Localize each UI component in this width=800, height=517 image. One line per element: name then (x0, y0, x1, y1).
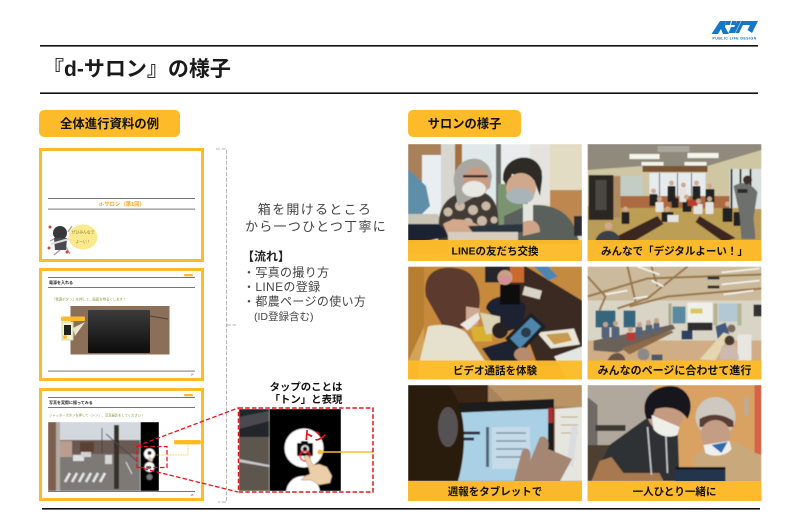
slide 3: taking a photo: 15 (191, 493, 194, 497)
slide 2: turning on the power: 14 (191, 372, 194, 376)
caption: ビデオ通話を体験 (453, 364, 537, 377)
heading pill: 全体進行資料の例 (39, 110, 180, 137)
heading pill: 全体進行資料の例: 全体進行資料の例 (60, 116, 159, 131)
slide 1: title slide: d-サロン（第1回） (99, 200, 145, 208)
red tap text トン: トン (301, 428, 327, 444)
caption (408, 481, 582, 501)
flow list: ・LINEの登録 (243, 279, 320, 294)
mascot with speech bubble (48, 224, 98, 255)
power button callout (61, 316, 85, 340)
photo: ビデオ通話を体験 (408, 266, 582, 380)
caption (588, 240, 762, 261)
note: タップのことは「トン」と表現: タップのことは (270, 382, 343, 394)
flow list: ・写真の撮り方 (243, 264, 329, 280)
heading pill: サロンの様子 (408, 110, 521, 137)
slide 3: taking a photo (40, 390, 202, 500)
photo: LINEの友だち交換 (408, 144, 582, 261)
caption (408, 240, 582, 261)
flow list: ・都農ページの使い方 (243, 294, 366, 308)
slide 2: turning on the power (40, 270, 202, 380)
photo: 一人ひとり一緒に (588, 385, 762, 501)
note: タップのことは「トン」と表現: 「トン」と表現 (270, 393, 343, 406)
mascot with speech bubble: ぜひみんなで (72, 230, 95, 234)
caption: 一人ひとり一緒に (633, 485, 716, 498)
mascot with speech bubble: よーい！ (75, 239, 91, 244)
seated participants (602, 322, 660, 338)
caption: LINEの友だち交換 (452, 244, 539, 258)
red dashed zoom frames (137, 408, 373, 492)
heading pill: サロンの様子: サロンの様子 (428, 116, 501, 131)
logo: Public Life Design: PUBLIC LIFE DESIGN (712, 36, 757, 40)
hand (301, 455, 332, 485)
shutter label with leader (154, 440, 201, 455)
photo: みんなで「デジタルよーい！」 (588, 144, 762, 261)
flow list: (ID登録含む) (254, 310, 314, 323)
tablet photo (70, 306, 170, 354)
slide 2: turning on the power: 「電源ボタン」を押して、画面を明るくします！ (52, 296, 126, 302)
enlarged shutter detail (239, 409, 373, 510)
group of people (622, 180, 740, 226)
slide 3: taking a photo: 写真を実際に撮ってみる (49, 399, 93, 405)
note: 箱を開けるところ: 箱を開けるところ (258, 202, 372, 217)
caption: 週報をタブレットで (448, 485, 542, 498)
note: 箱を開けるところ: から一つひとつ丁寧に (245, 219, 387, 234)
camera icon (297, 441, 313, 456)
caption (408, 360, 582, 380)
caption (588, 360, 762, 380)
note: 箱を開けるところ (245, 202, 387, 234)
caption (588, 481, 762, 501)
caption: みんなのページに合わせて進行 (598, 363, 751, 377)
street photo (48, 422, 159, 491)
logo: Public Life Design (712, 21, 758, 40)
title: 『d-サロン』の様子 (43, 58, 231, 81)
note: タップのことは「トン」と表現 (270, 382, 343, 406)
caption: みんなで「デジタルよーい！」 (601, 244, 748, 258)
photo: 週報をタブレットで (408, 385, 582, 501)
slide 1: title slide (40, 150, 202, 260)
flow list (242, 248, 366, 323)
photo: みんなのページに合わせて進行 (588, 266, 762, 380)
slide 2: turning on the power: 電源を入れる (49, 279, 73, 285)
flow list: 【流れ】 (242, 248, 290, 264)
slide 3: taking a photo: シャッターボタンを押して（トン）、写真撮影をしてください！ (49, 412, 144, 418)
bracket connecting slides to notes (216, 149, 236, 502)
